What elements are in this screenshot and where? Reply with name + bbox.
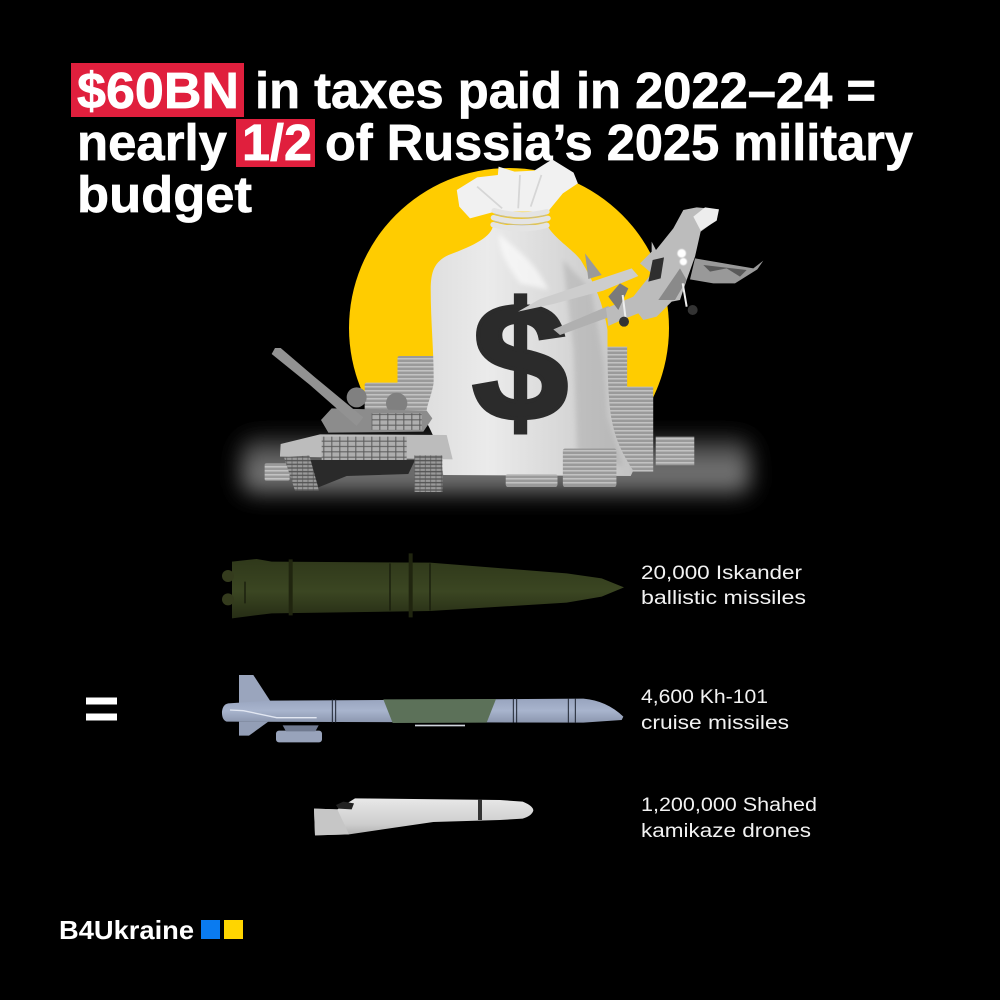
ground glow: [242, 438, 750, 494]
title: budget: [77, 166, 252, 223]
title: 1/2: [242, 114, 312, 171]
label: Kh-101: cruise missiles: [641, 713, 789, 734]
title: [71, 62, 914, 223]
equals sign: [86, 698, 117, 720]
dollar sign: $: [472, 269, 568, 456]
highlight: 1/2: [236, 119, 315, 167]
rope: [493, 211, 548, 229]
label: Iskander: [641, 563, 806, 609]
highlight: $60BN: [71, 63, 244, 117]
label: Shahed: [641, 795, 817, 842]
icon: fighter jet: [518, 207, 763, 335]
title: in taxes paid in 2022–24 =: [255, 62, 876, 119]
money bag: [426, 159, 633, 476]
coin stacks behind the bag: [265, 347, 694, 481]
logo: B4Ukraine: B4Ukraine: [59, 915, 194, 945]
missile: Kh-101: [222, 675, 623, 742]
icon: blue square: [201, 920, 220, 939]
illustration: money bag, tank and jet: [242, 159, 763, 494]
title: $60BN: [77, 62, 239, 119]
mask below the circle: [340, 402, 680, 492]
label: Iskander: 20,000 Iskander: [641, 563, 803, 584]
drone: Shahed: [314, 798, 533, 835]
title: of Russia’s 2025 military: [325, 114, 914, 171]
front coin stacks: [506, 449, 616, 487]
label: Kh-101: [641, 687, 789, 734]
label: Shahed: kamikaze drones: [641, 821, 811, 842]
missile: Iskander: [222, 553, 624, 618]
icon: yellow square: [224, 920, 243, 939]
yellow circle: [349, 168, 669, 488]
icon: tank: [272, 348, 453, 492]
logo: B4Ukraine: [59, 915, 243, 945]
label: Iskander: ballistic missiles: [641, 588, 806, 609]
label: Shahed: 1,200,000 Shahed: [641, 795, 817, 816]
label: Kh-101: 4,600 Kh-101: [641, 687, 768, 708]
title: nearly: [77, 114, 228, 171]
